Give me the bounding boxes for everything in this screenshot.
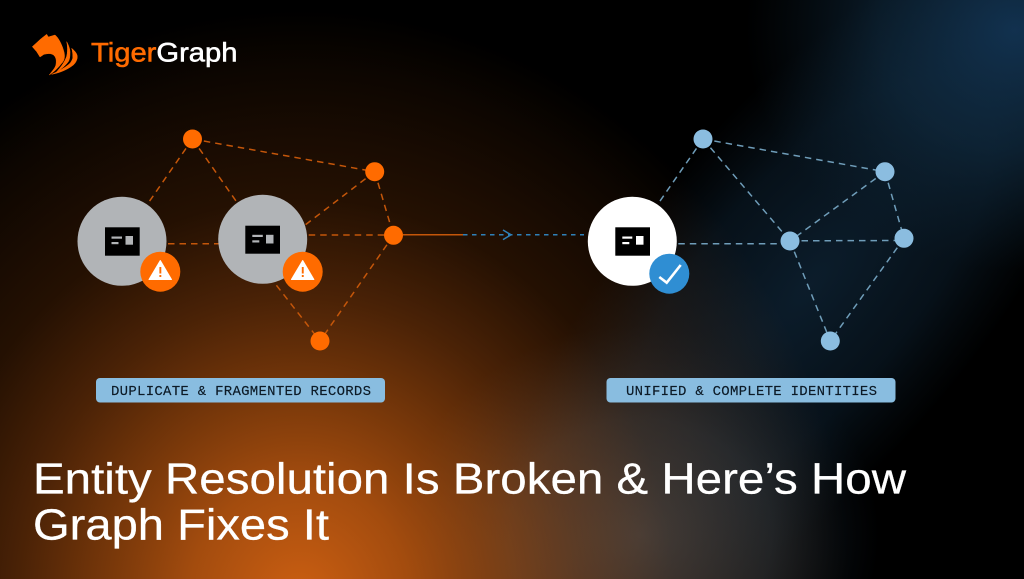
wordmark: TigerGraph (91, 38, 238, 68)
icon: warning badge 2 (283, 252, 323, 292)
arrow: fragmented to unified (403, 230, 584, 240)
label: unified identities (606, 378, 896, 402)
panel: unified graph (blue) (588, 130, 914, 402)
icon: warning badge 1 (140, 252, 180, 292)
blue nodes (694, 130, 914, 350)
dashed network edges: blue (632, 139, 904, 341)
orange nodes (183, 130, 403, 350)
duplicate record 2 (218, 195, 307, 284)
icon: check badge (649, 254, 689, 294)
label: unified identities: UNIFIED & COMPLETE IDENTITIES (626, 384, 877, 400)
logo: TigerGraph (32, 34, 237, 75)
title (33, 456, 907, 550)
panel: fragmented graph (orange) (78, 130, 403, 402)
unified record (588, 197, 677, 286)
label: duplicate records (96, 378, 385, 402)
title: Entity Resolution Is Broken & Here’s How (33, 456, 907, 504)
title: Graph Fixes It (33, 502, 329, 550)
label: duplicate records: DUPLICATE & FRAGMENTED RECORDS (111, 384, 371, 400)
duplicate record 1 (78, 197, 166, 286)
icon: tiger head (32, 34, 77, 75)
dashed network edges: orange (122, 139, 394, 341)
